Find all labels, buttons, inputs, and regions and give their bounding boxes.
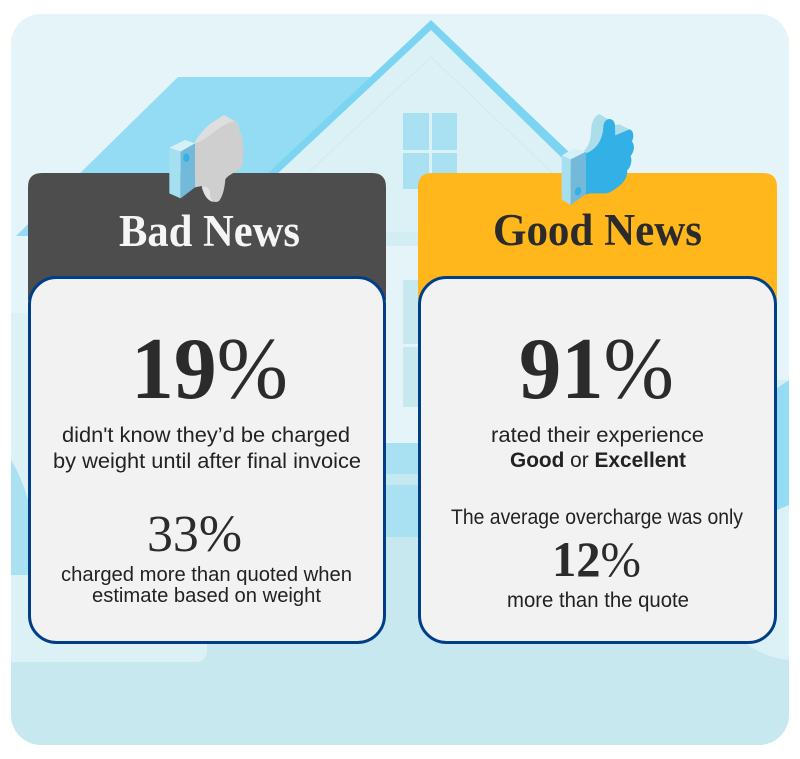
panel: bad news — [28, 173, 386, 642]
card: good news stats — [420, 278, 776, 642]
card: bad news stats — [30, 278, 384, 642]
stat: 91%: 91% — [519, 321, 674, 418]
text: didn't know: didn't know they’d be charged — [62, 424, 350, 447]
header: good news — [418, 173, 777, 300]
text: charged more: charged more than quoted when — [61, 564, 352, 586]
roof — [16, 77, 372, 236]
heading: good news: Good News — [493, 205, 702, 255]
text: good or excellent: Good or Excellent — [510, 449, 686, 472]
stat: 33%: 33% — [147, 506, 242, 563]
text: rated: rated their experience — [491, 424, 704, 447]
text: by weight: by weight until after final invoice — [53, 450, 361, 473]
header: bad news — [28, 173, 386, 300]
roof edge stripe — [265, 20, 572, 176]
right hill — [746, 510, 789, 660]
gable wall — [240, 26, 600, 246]
stat: 12%: 12% — [552, 531, 641, 587]
text: average overcharge: The average overcharge was only — [451, 506, 743, 529]
icon: thumbs up — [562, 114, 634, 205]
left ground edge — [11, 313, 40, 575]
ground — [11, 537, 789, 745]
gable band — [386, 232, 418, 246]
house base — [386, 443, 418, 537]
lower window — [403, 280, 418, 407]
panel: good news — [418, 173, 777, 642]
upper window — [403, 113, 457, 189]
stat: 19%: 19% — [131, 321, 288, 418]
icon: thumbs down — [169, 115, 244, 202]
text: estimate based: estimate based on weight — [92, 585, 321, 607]
heading: bad news: Bad News — [119, 206, 300, 256]
gable inner outline — [308, 56, 552, 173]
text: more than quote: more than the quote — [507, 589, 689, 612]
